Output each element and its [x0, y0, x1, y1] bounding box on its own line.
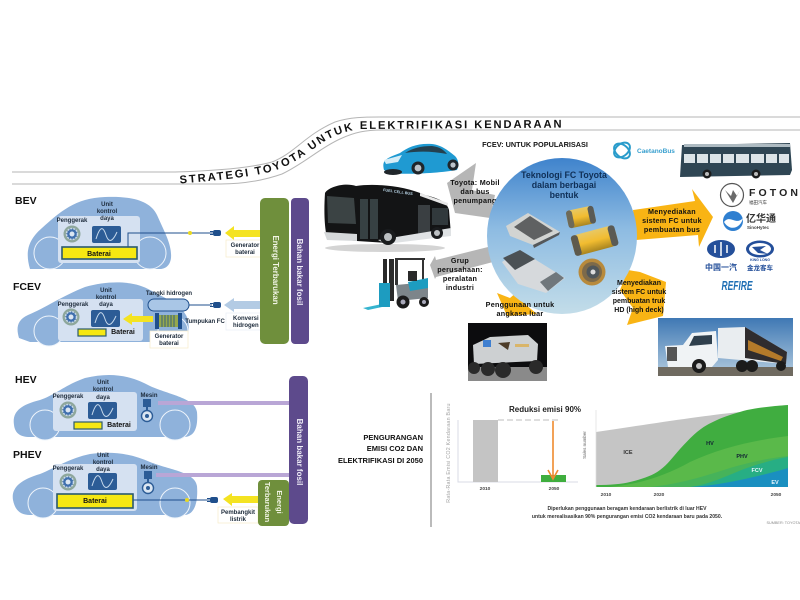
FC technology circle: Teknologi FC Toyota — [521, 170, 607, 180]
panel: BEV — [15, 195, 264, 269]
HEV labels: daya — [96, 395, 110, 401]
area chart: sales number — [582, 405, 788, 498]
area FCV — [690, 457, 788, 487]
icon: blue sedan — [383, 144, 458, 175]
axis labels: 2010 — [601, 492, 612, 498]
fossil fuel bar bottom — [289, 376, 308, 524]
icon: forklift — [363, 258, 429, 310]
FCEV inner arrow — [123, 313, 153, 325]
logo: Foton: 福田汽车 — [749, 199, 767, 206]
text: bus system: pembuatan bus — [644, 225, 700, 234]
HEV car body — [14, 375, 197, 437]
axis labels — [601, 492, 782, 498]
FCEV small battery — [78, 329, 135, 336]
label FCEV: FCEV — [13, 281, 41, 293]
logo: ReFire: REFIRE — [722, 278, 753, 293]
text: Grup perusahaan: peralatan — [443, 274, 477, 283]
PHEV renewable box — [258, 480, 289, 526]
BEV battery: Baterai — [87, 251, 111, 258]
BEV inverter — [92, 226, 121, 243]
PHEV inner panel — [53, 464, 137, 511]
PHEV labels: daya — [96, 467, 110, 473]
fossil fuel bar top — [291, 198, 309, 344]
BEV labels: daya — [100, 216, 114, 222]
BEV labels: Penggerak — [57, 218, 88, 224]
heading: pengurangan emisi — [338, 433, 423, 465]
y axis title: Sales number — [582, 431, 587, 459]
hydrogen conversion box — [226, 313, 267, 330]
BEV car body — [28, 197, 171, 269]
source: SUMBER: TOYOTA — [766, 521, 800, 525]
text: Grup perusahaan: perusahaan: — [437, 265, 483, 274]
image: lunar rover — [468, 323, 547, 381]
text: Grup perusahaan: Grup — [451, 256, 469, 265]
text: Toyota mobil dan bus — [450, 178, 500, 205]
logo: SinoHytec — [723, 211, 776, 231]
PHEV labels: Unit — [97, 453, 109, 459]
logo: FAW — [705, 240, 737, 272]
axis labels: 2050 — [771, 492, 782, 498]
axis labels: 2020 — [654, 492, 665, 498]
title banner: STRATEGI TOYOTA UNTUK ELEKTRIFIKASI KENDARAAN — [180, 120, 561, 184]
area ICE — [596, 405, 788, 487]
FC technology circle — [487, 158, 637, 314]
PHEV labels: kontrol — [93, 460, 113, 466]
PHEV engine — [142, 471, 154, 494]
power plant box: listrik — [230, 517, 247, 523]
text: Toyota mobil dan bus: Toyota: Mobil — [450, 178, 500, 187]
FCEV inner panel — [58, 299, 143, 341]
BEV wheels — [34, 237, 166, 269]
HEV battery: Baterai — [107, 422, 131, 429]
fossil fuel bar top: Bahan bakar fosil — [295, 239, 304, 305]
PHEV battery — [57, 494, 133, 508]
image: electric bus — [680, 143, 792, 178]
caption: untuk merealisasikan 90% pengurangan emisi CO2 kendaraan baru pada 2050. — [532, 514, 723, 520]
FC technology circle: bentuk — [550, 190, 579, 200]
PHEV inverter — [88, 473, 117, 490]
area PHV — [610, 436, 788, 487]
FC stack: Tumpukan FC — [185, 319, 225, 325]
renewable energy bar — [260, 198, 289, 344]
label BEV: BEV — [15, 195, 37, 207]
FCEV wheels — [34, 316, 188, 346]
fossil fuel bar bottom: Bahan bakar fosil — [295, 419, 304, 485]
area labels: PHV — [736, 454, 748, 460]
logo: CaetanoBus — [611, 140, 675, 161]
caption: Diperlukan penggunaan beragam kendaraan berlistrik di luar HEV — [547, 506, 707, 512]
area labels: HV — [706, 441, 714, 447]
PHEV wheels — [28, 488, 190, 518]
BEV inner panel — [58, 216, 140, 263]
text: bus system: Menyediakan — [648, 207, 696, 216]
HEV battery — [74, 422, 131, 429]
area labels — [623, 441, 779, 486]
FCEV motor — [62, 308, 80, 326]
y axis label: Rata-Rata Emisi CO2 Kendaraan Baru — [446, 403, 452, 503]
PHEV battery: Baterai — [83, 498, 107, 505]
logo: SinoHytec: SinoHytec — [747, 225, 770, 230]
hydrogen tank — [146, 291, 192, 311]
FCEV blue arrow — [224, 298, 260, 312]
logo: King Long — [746, 240, 774, 272]
FCEV generator box: baterai — [159, 341, 179, 347]
icon: large hydrogen tank — [570, 225, 619, 257]
label PHEV: PHEV — [13, 449, 42, 461]
logo: Foton — [720, 184, 798, 206]
text: bus system: sistem FC untuk — [642, 216, 702, 225]
FC stack — [155, 313, 225, 329]
PHEV motor — [60, 474, 76, 490]
label HEV: HEV — [15, 374, 37, 386]
FCEV generator box: Generator — [155, 334, 184, 340]
icon: fuel cell bus: FUEL CELL BUS — [383, 188, 413, 196]
PHEV renewable box: Terbarukan — [263, 482, 272, 523]
hydrogen conversion box: Konversi — [233, 316, 259, 322]
BEV labels: Unit — [101, 202, 113, 208]
bar labels: 2010 — [480, 486, 491, 492]
panel: HEV — [14, 374, 289, 440]
heading: FCEV popularisasi: FCEV: UNTUK POPULARISASI — [482, 140, 588, 149]
HEV fuel line — [158, 401, 289, 405]
text: Toyota mobil dan bus: dan bus — [460, 187, 490, 196]
hydrogen tank: Tangki hidrogen — [146, 291, 192, 297]
panel: FCEV — [13, 281, 267, 348]
text: truck system: Menyediakan — [617, 280, 661, 287]
title banner — [12, 116, 800, 184]
PHEV labels: Mesin — [140, 465, 158, 471]
arrow: to bus makers — [633, 189, 713, 247]
hydrogen conversion box: hidrogen — [233, 323, 259, 329]
bar 2010 — [473, 420, 498, 482]
FCEV car body — [18, 282, 189, 342]
HEV labels — [53, 380, 158, 401]
renewable energy bar: Energi Terbarukan — [271, 235, 280, 305]
FC technology circle: dalam berbagai — [532, 180, 596, 190]
logo: Foton: FOTON — [749, 187, 798, 199]
BEV labels: kontrol — [97, 209, 117, 215]
text: Penggunaan untuk angkasa luar: Penggunaan untuk — [486, 300, 554, 309]
icon: fuel cell bus — [324, 185, 451, 252]
HEV motor — [60, 402, 76, 418]
FCEV labels: kontrol — [96, 295, 116, 301]
HEV labels: Unit — [97, 380, 109, 386]
bar 2050 — [541, 475, 566, 482]
logo: King Long: 金龙客车 — [747, 263, 774, 272]
arrow: to trucks — [620, 270, 666, 325]
PHEV labels — [53, 453, 158, 473]
FCEV labels: daya — [99, 302, 113, 308]
text: Grup perusahaan: industri — [446, 283, 474, 292]
image: truck — [658, 318, 793, 376]
area labels: FCV — [752, 468, 763, 474]
caption — [532, 506, 723, 520]
heading: pengurangan emisi: ELEKTRIFIKASI DI 2050 — [338, 456, 423, 465]
FCEV small battery: Baterai — [111, 329, 135, 336]
BEV battery — [62, 247, 137, 259]
power plant box — [218, 507, 258, 523]
HEV inverter — [88, 402, 117, 419]
FCEV generator box — [150, 331, 188, 348]
BEV generator box — [226, 240, 264, 257]
BEV generator box: Generator — [231, 243, 260, 249]
PHEV yellow arrow — [223, 493, 258, 506]
HEV engine — [142, 399, 152, 422]
BEV cable and plug — [128, 230, 221, 247]
PHEV fuel line — [156, 473, 289, 477]
area light lower — [650, 456, 788, 487]
icon: small hydrogen tank — [565, 205, 597, 229]
HEV wheels — [30, 410, 190, 440]
heading: pengurangan emisi: PENGURANGAN — [363, 433, 423, 442]
logo: CaetanoBus: CaetanoBus — [637, 148, 675, 155]
arrow: to space — [497, 292, 537, 316]
HEV labels: kontrol — [93, 387, 113, 393]
icon: power converter — [502, 250, 565, 293]
arrow: to Toyota vehicles — [447, 163, 495, 218]
HEV inner panel — [53, 392, 137, 431]
BEV motor — [64, 226, 80, 242]
text: truck system: pembuatan truk — [613, 298, 665, 305]
logo: SinoHytec: 亿华通 — [746, 212, 776, 225]
heading: pengurangan emisi: EMISI CO2 DAN — [367, 444, 423, 453]
chart title: Reduksi emisi 90% — [509, 405, 581, 414]
area labels: EV — [771, 480, 779, 486]
PHEV car body — [13, 453, 197, 515]
text: bus system — [642, 207, 702, 234]
text: truck system: HD (high deck) — [614, 307, 664, 314]
text: truck system — [612, 280, 666, 314]
arrow: to industrial equipment — [430, 247, 493, 279]
BEV generator box: baterai — [235, 250, 255, 256]
icon: FC stack — [506, 213, 560, 248]
HEV labels: Mesin — [140, 393, 158, 399]
BEV labels — [57, 202, 117, 224]
bar labels — [480, 486, 560, 492]
text: Penggunaan untuk angkasa luar — [486, 300, 554, 318]
reduction arrow — [548, 421, 558, 479]
area HV — [596, 405, 788, 487]
area EV — [690, 468, 788, 487]
FCEV inverter — [91, 310, 120, 327]
HEV labels: Penggerak — [53, 394, 84, 400]
power plant box: Pembangkit — [221, 510, 255, 516]
area labels: ICE — [623, 450, 633, 456]
bar labels: 2050 — [549, 486, 560, 492]
FCEV labels: Penggerak — [58, 302, 89, 308]
PHEV labels: Penggerak — [53, 466, 84, 472]
PHEV cable and plug — [133, 497, 218, 503]
bar chart: emission reduction — [446, 403, 581, 503]
BEV yellow arrow — [225, 226, 260, 240]
icon: motor — [578, 258, 606, 286]
FCEV hydrogen line and plug — [189, 302, 221, 308]
PHEV renewable box: Energi — [275, 490, 284, 514]
text: Penggunaan untuk angkasa luar: angkasa luar — [497, 309, 543, 318]
FCEV labels — [58, 288, 116, 308]
FCEV labels: Unit — [100, 288, 112, 294]
text: truck system: sistem FC untuk — [612, 289, 666, 296]
text: Grup perusahaan — [437, 256, 483, 292]
logo: FAW: 中国一汽 — [705, 262, 737, 272]
panel: PHEV — [13, 449, 289, 526]
logo: King Long: KING LONG — [750, 258, 770, 262]
text: Toyota mobil dan bus: penumpang — [454, 196, 496, 205]
